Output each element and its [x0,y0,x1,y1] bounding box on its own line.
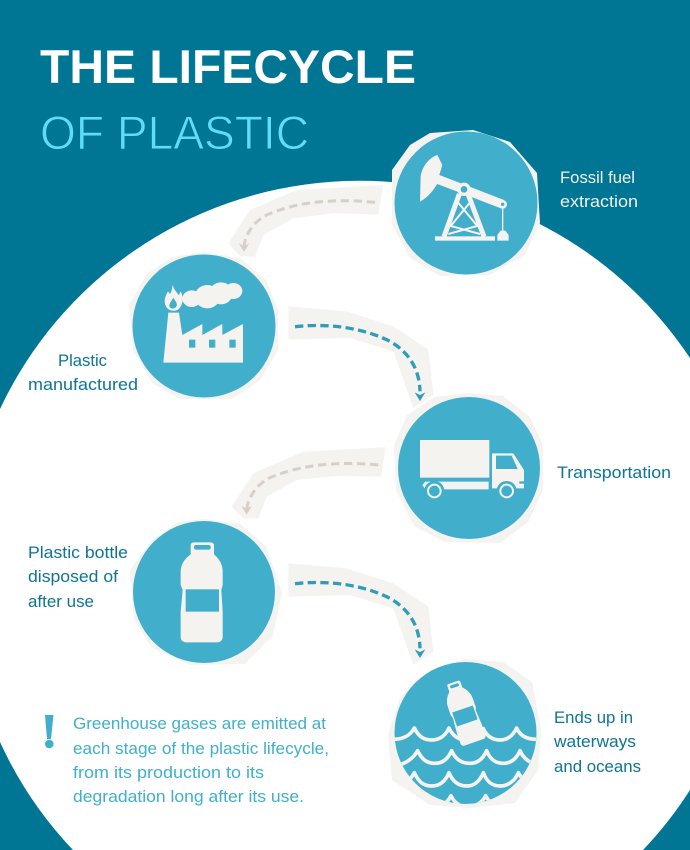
label: plastic bottle disposed: Plastic bottle [28,543,128,562]
label: fossil fuel extraction: Fossil fuel [560,168,635,187]
callout: greenhouse gases note: from its production to its [73,763,264,782]
callout: greenhouse gases note: degradation long after its use. [73,787,304,806]
title: THE LIFECYCLE [40,40,416,93]
stage 1: fossil fuel extraction icon [392,130,540,276]
label: plastic bottle disposed [28,543,128,611]
label: transportation: Transportation [557,463,671,482]
stage 4: plastic bottle icon [130,519,282,665]
icon: exclamation mark [45,715,54,748]
arrow: extraction to manufacture [228,185,383,257]
label: plastic manufactured: Plastic [58,351,107,370]
label: plastic manufactured: manufactured [28,375,138,394]
callout: greenhouse gases note [73,714,329,806]
label: ends up in waterways: waterways [553,732,636,751]
label: fossil fuel extraction: extraction [560,192,638,211]
label: ends up in waterways: Ends up in [554,708,633,727]
callout: greenhouse gases note: Greenhouse gases are emitted at [73,714,326,733]
arrow: manufacture to transportation [288,306,433,408]
white background circle [0,181,690,850]
arrow: bottle to waterways [288,563,433,665]
stage 3: truck icon [394,393,543,543]
label: plastic bottle disposed: after use [28,592,94,611]
title [40,40,416,159]
label: ends up in waterways [553,708,641,776]
label: plastic bottle disposed: disposed of [28,567,118,586]
callout: greenhouse gases note: each stage of the plastic lifecycle, [73,739,329,758]
stage 5: bottle in water icon [388,659,541,808]
label: ends up in waterways: and oceans [554,757,641,776]
label: fossil fuel extraction [560,168,638,211]
stage 2: factory icon [129,252,278,399]
arrow: transportation to bottle [232,447,386,518]
title: OF PLASTIC [40,106,309,159]
label: plastic manufactured [28,351,138,394]
